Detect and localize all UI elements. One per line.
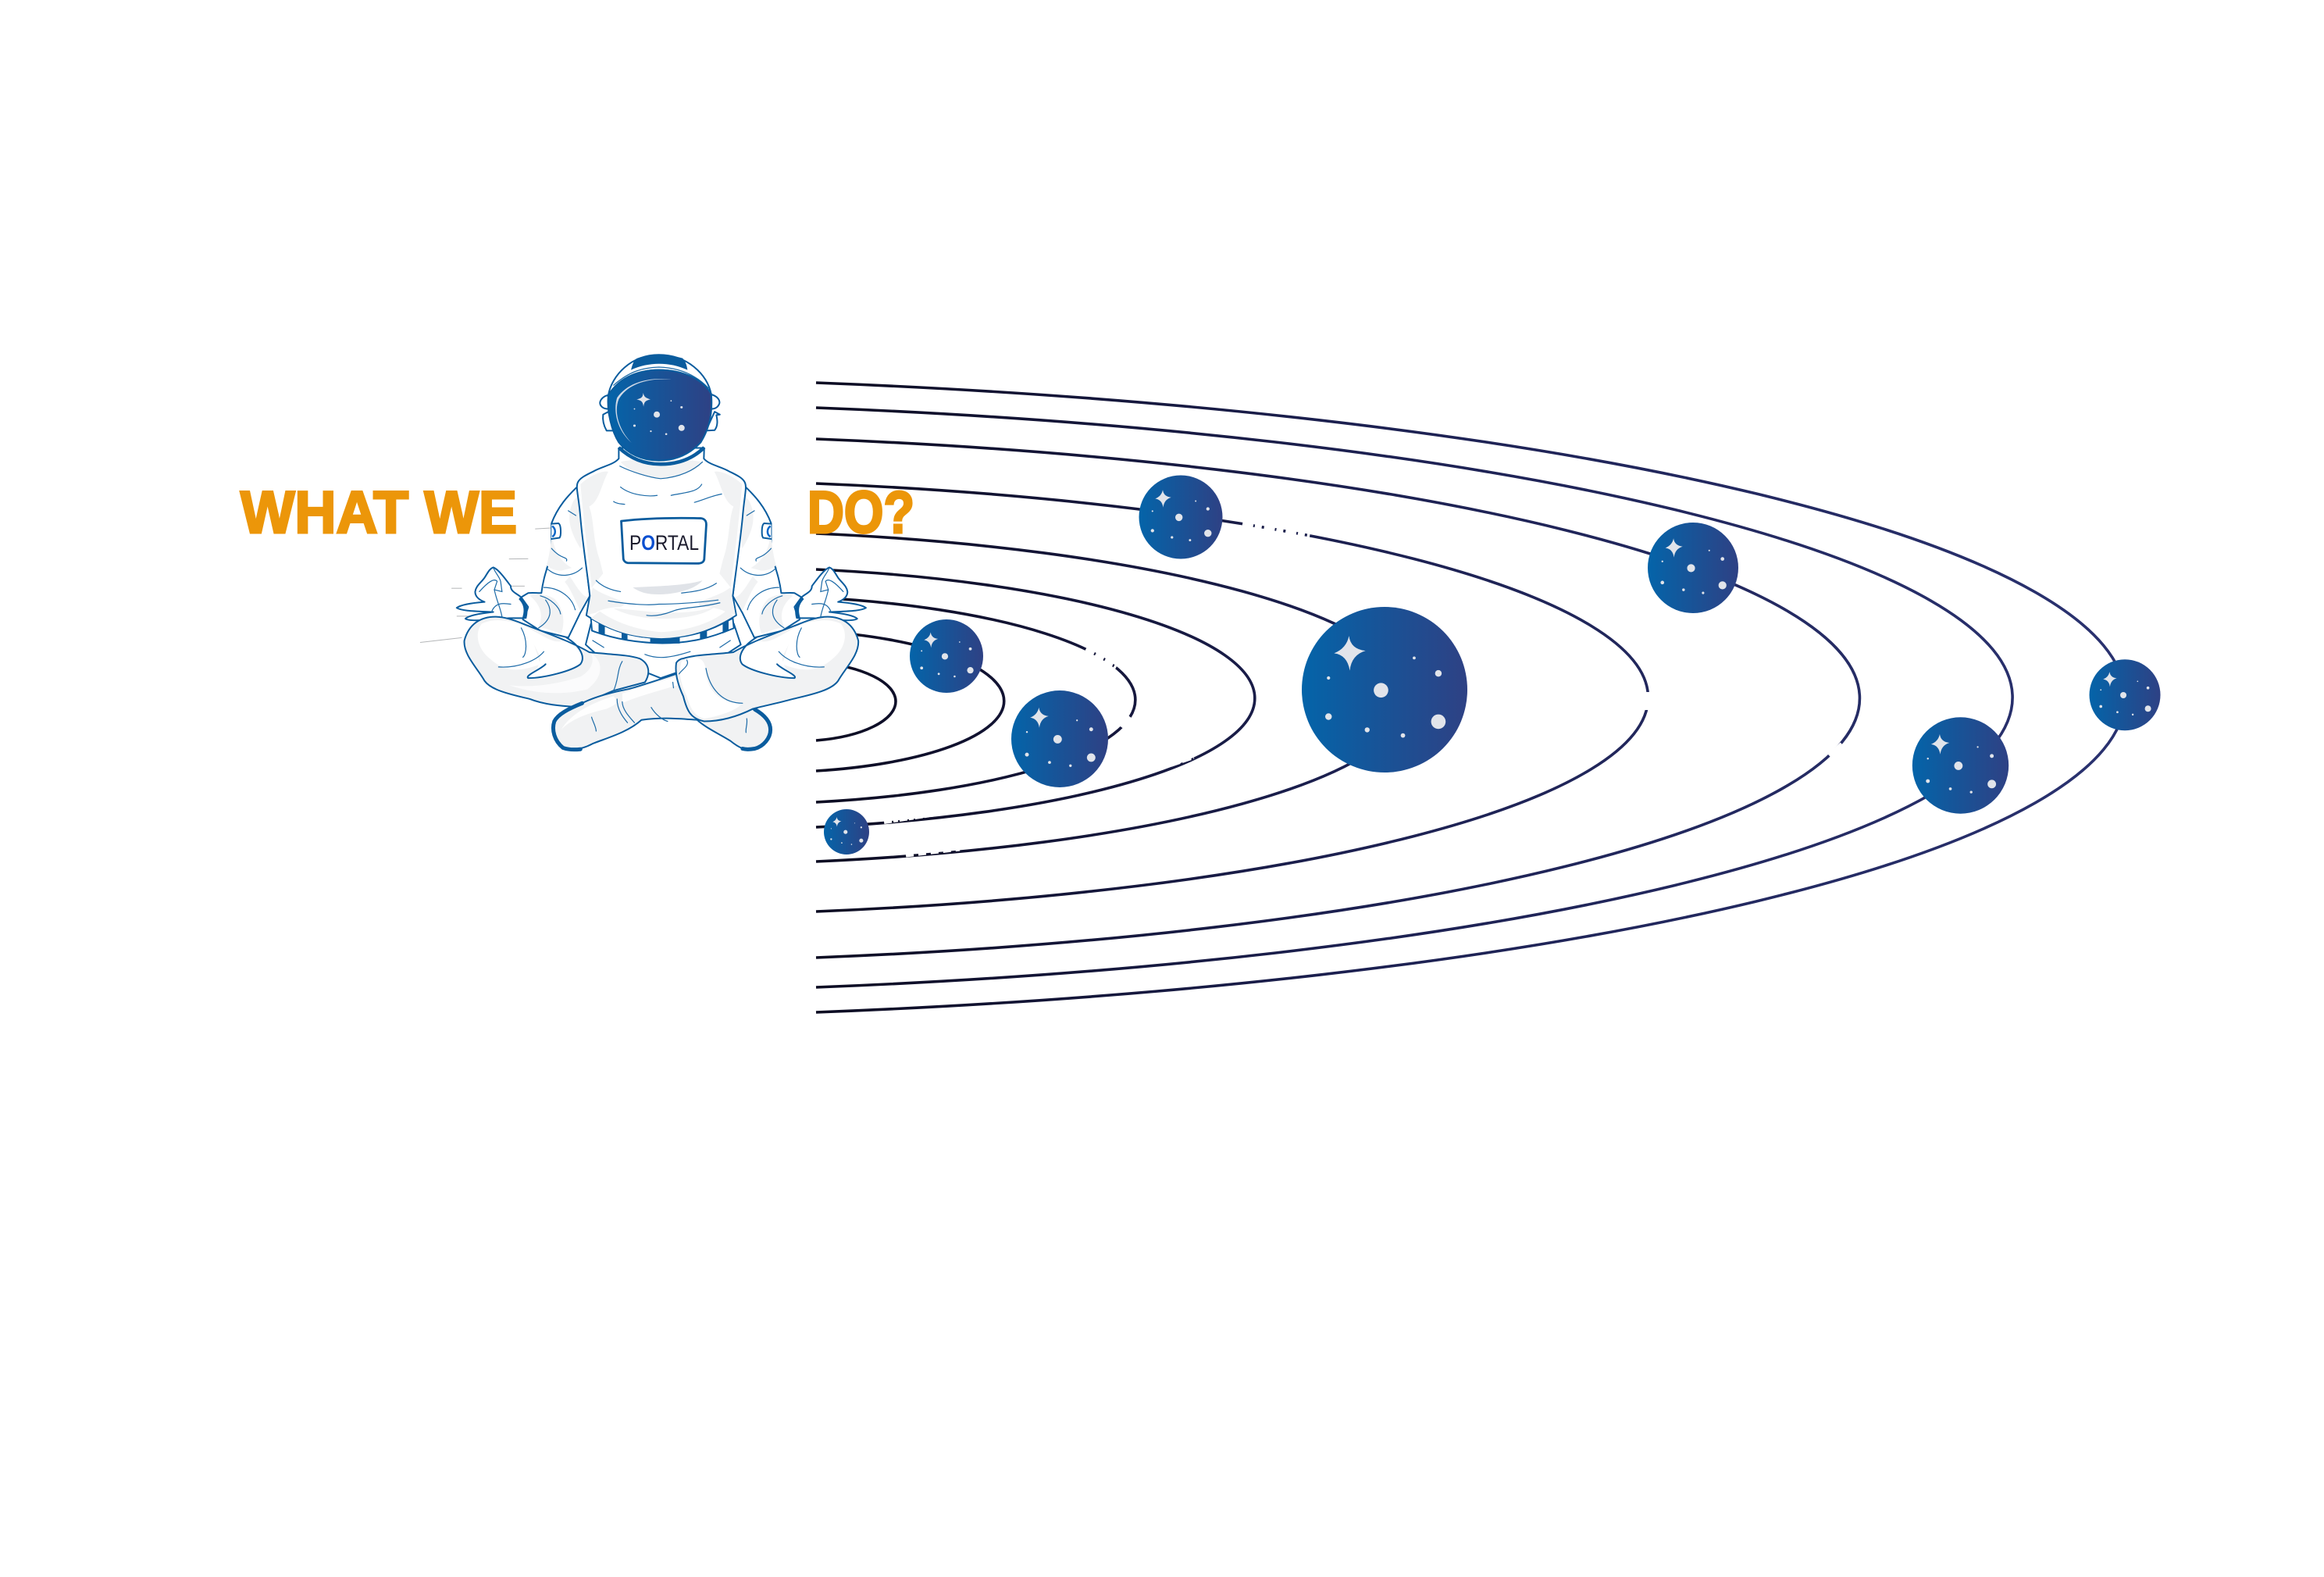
- helmet: [603, 412, 614, 430]
- chest badge wordmark: PORTAL: [629, 531, 699, 555]
- planet: outermost: [2090, 659, 2160, 730]
- belt: [591, 618, 734, 644]
- astronaut: [420, 355, 866, 750]
- crossed feet: [697, 708, 771, 749]
- planet: right upper: [1648, 523, 1738, 613]
- right thigh: [675, 617, 858, 722]
- title: DO?: DO?: [807, 480, 914, 546]
- pelvis: [586, 624, 741, 678]
- planet: inner upper: [910, 619, 983, 693]
- planet: small: [824, 809, 869, 855]
- planet: right lower: [1912, 717, 2009, 814]
- chest badge: [622, 518, 706, 563]
- torso: [577, 448, 746, 638]
- planet: upper: [1139, 475, 1223, 559]
- left thigh: [465, 617, 648, 707]
- planet: inner lower: [1011, 690, 1108, 787]
- orbits: [816, 383, 2125, 1012]
- title: WHAT WE: WHAT WE: [241, 480, 517, 546]
- planet: large centre: [1302, 607, 1467, 772]
